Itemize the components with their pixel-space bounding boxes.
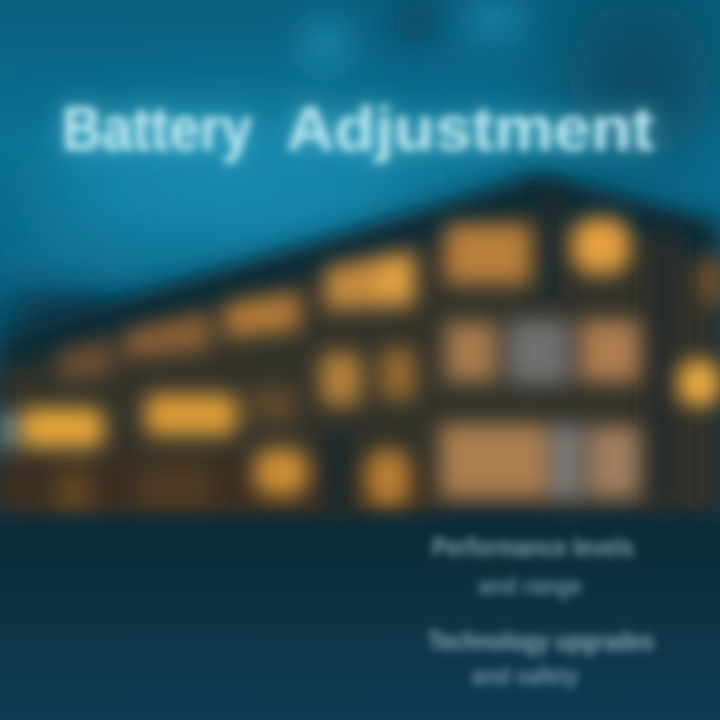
building silhouette [0,172,720,525]
title glow: Adjustment [286,95,654,164]
title text: Adjustment [286,95,654,164]
caption text bottom: and safety [472,663,579,690]
caption text top: and range [478,573,582,600]
right column [648,230,678,510]
title text: Battery [62,95,252,164]
column middle [322,430,354,515]
building [0,172,720,525]
ground [0,505,720,720]
top floor windows [60,218,720,382]
vertical column [540,190,562,300]
lower floor windows [0,388,640,512]
facade low floor shade [0,460,430,515]
title glow [62,95,654,164]
caption text bottom [428,626,654,690]
title text [62,95,654,164]
caption text top [432,532,634,600]
middle floor windows [320,320,720,406]
building facade [0,212,720,515]
caption text bottom: Technology upgrades [428,626,654,656]
caption text top: Performance levels [432,532,634,562]
title glow: Battery [62,95,252,164]
